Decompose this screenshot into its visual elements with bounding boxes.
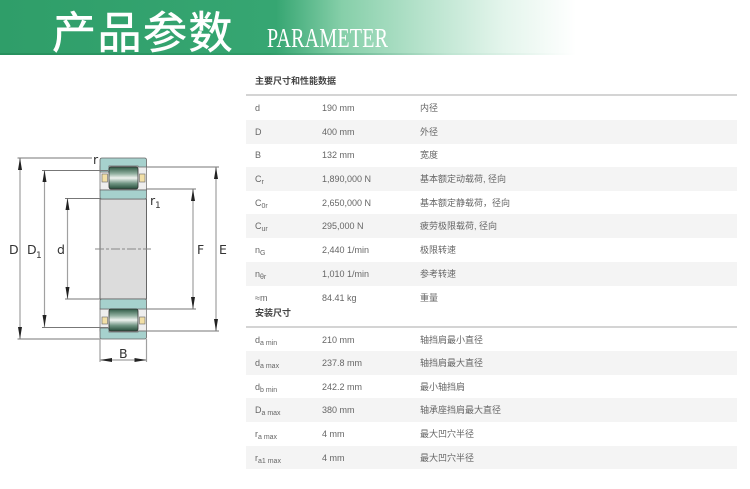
row: ra1 max (246, 446, 737, 469)
row: da max: 237.8 mm (322, 358, 362, 368)
row: da max: 轴挡肩最大直径 (420, 358, 483, 368)
dimension labels: D (27, 242, 37, 257)
dimension labels: r (150, 193, 156, 208)
row: ra1 max: ra1 max (255, 453, 281, 465)
row: Cur: 疲劳极限载荷, 径向 (420, 221, 497, 231)
row: Cur (246, 214, 737, 238)
row: Da max: 轴承座挡肩最大直径 (420, 405, 501, 415)
row: Cur: 295,000 N (322, 221, 364, 231)
dimension labels: E (219, 242, 227, 257)
row: B: B (255, 150, 261, 160)
row: D (246, 120, 737, 144)
row: da min (255, 335, 483, 347)
row: nθr: 1,010 1/min (322, 269, 369, 279)
row: nθr: 参考转速 (420, 269, 456, 279)
dimension labels: B (119, 346, 128, 361)
row: ra max: ra max (255, 429, 277, 441)
row: da min: 轴挡肩最小直径 (420, 335, 483, 345)
row: B: 宽度 (420, 150, 438, 160)
row: ra1 max: 4 mm (322, 453, 344, 463)
row: C0r: 2,650,000 N (322, 198, 371, 208)
dimension labels: 1 (155, 201, 161, 211)
row: B (255, 150, 438, 160)
row: D: 外径 (420, 127, 438, 137)
dimension labels (9, 152, 227, 361)
header banner (0, 0, 600, 55)
row: D: D (255, 127, 262, 137)
row: da min: 210 mm (322, 335, 355, 345)
row: d: 190 mm (322, 103, 355, 113)
row: Da max: 380 mm (322, 405, 355, 415)
row: d: d (255, 103, 260, 113)
row: db min: db min (255, 382, 277, 394)
row: ra max: 最大凹穴半径 (420, 429, 474, 439)
row: Cr: 基本额定动载荷, 径向 (420, 174, 506, 184)
heading: mounting dimensions: 安装尺寸 (255, 308, 291, 318)
row: nG: 极限转速 (420, 245, 456, 255)
row: ra max: 4 mm (322, 429, 344, 439)
row: B: 132 mm (322, 150, 355, 160)
row: db min (255, 382, 465, 394)
bearing cross-section diagram (9, 152, 227, 362)
row: D: 400 mm (322, 127, 355, 137)
row: C0r: 基本额定静载荷，径向 (420, 198, 510, 208)
row: d: 内径 (420, 103, 438, 113)
row: Cr (246, 167, 737, 191)
row: nθr: nθr (255, 269, 266, 281)
dimension labels: 1 (36, 251, 42, 261)
dimension arrowheads (18, 158, 218, 362)
row: db min: 最小轴挡肩 (420, 382, 465, 392)
row: mass: ≈m (255, 293, 267, 303)
row: da max (246, 351, 737, 375)
row: mass: 84.41 kg (322, 293, 357, 303)
row: Cr: Cr (255, 174, 264, 186)
row: ra1 max: 最大凹穴半径 (420, 453, 474, 463)
row: C0r: C0r (255, 198, 268, 210)
dimension labels: D (9, 242, 19, 257)
row: Cr: 1,890,000 N (322, 174, 371, 184)
row: mass: 重量 (420, 293, 438, 303)
row: nG: nG (255, 245, 265, 257)
row: nθr (246, 262, 737, 286)
row: db min: 242.2 mm (322, 382, 362, 392)
row: Cur: Cur (255, 221, 268, 233)
heading: main dimensions and performance data: 主要尺寸和性能数据 (255, 76, 336, 86)
row: nG (255, 245, 456, 257)
row: C0r (255, 198, 510, 210)
bearing body (95, 158, 151, 339)
banner subtitle: PARAMETER (267, 23, 388, 53)
dimension labels: r (93, 152, 99, 167)
dimension labels: d (57, 242, 65, 257)
row: ra max (255, 429, 474, 441)
row: Da max (246, 398, 737, 422)
row: nG: 2,440 1/min (322, 245, 369, 255)
dimension labels: F (197, 242, 204, 257)
row: da max: da max (255, 358, 279, 370)
row: Da max: Da max (255, 405, 281, 417)
row: da min: da min (255, 335, 277, 347)
row: mass (255, 293, 438, 303)
row: d (255, 103, 438, 113)
dimension lines (18, 158, 219, 362)
